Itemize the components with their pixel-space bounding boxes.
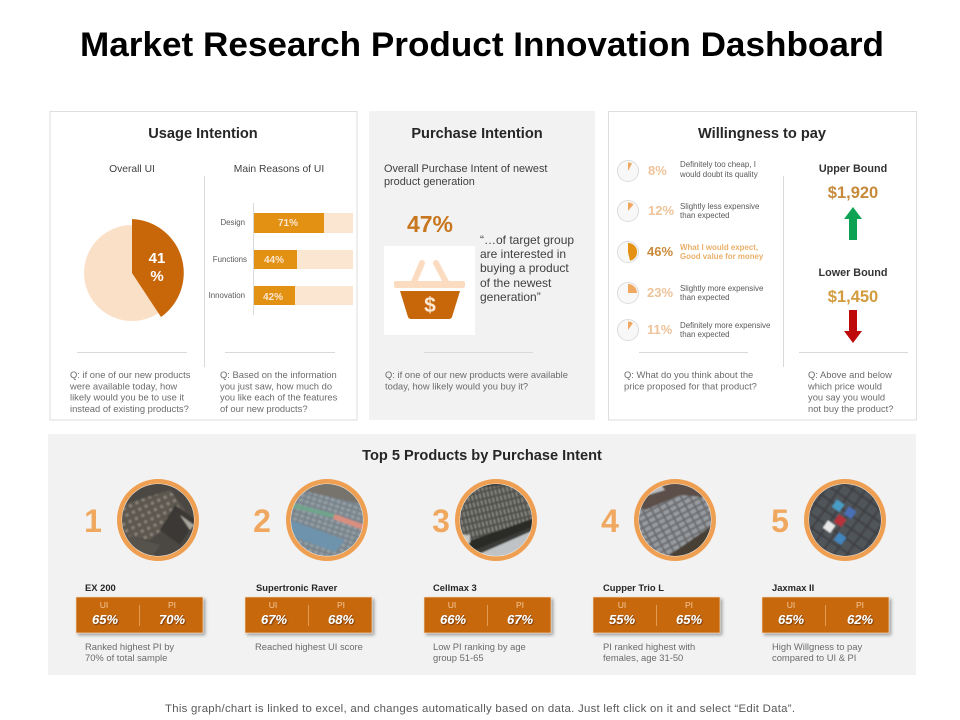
product 3: 3	[432, 503, 450, 539]
price row: 12%: than expected	[680, 211, 730, 220]
product 2: 67%	[261, 612, 287, 627]
product 1: 1	[84, 503, 102, 539]
icon: shopping basket	[384, 246, 475, 335]
price row: 11%: Definitely more expensive	[680, 321, 771, 330]
pie chart: overall UI 41%	[84, 219, 184, 321]
subheading: overall purchase intent: Overall Purchase Intent of newest	[384, 163, 547, 175]
heading: willingness to pay: Willingness to pay	[698, 126, 827, 142]
price row: 12%: 12%	[648, 203, 674, 218]
question: above and below: Q: Above and below	[808, 369, 892, 380]
product 3: UI	[448, 600, 456, 610]
panel: willingness to pay	[608, 112, 916, 420]
photo: product 5	[806, 481, 884, 559]
price row: 23%	[618, 282, 764, 304]
product 2: Reached highest UI score	[255, 641, 363, 652]
upper bound: Upper Bound	[819, 163, 887, 175]
title: Market Research Product Innovation Dashboard	[80, 26, 884, 64]
lower bound: $1,450	[828, 288, 878, 306]
upper bound	[819, 163, 887, 240]
question: overall UI: Q: if one of our new products	[70, 369, 191, 380]
question: above and below: not buy the product?	[808, 403, 893, 414]
bar chart: main reasons: Innovation	[209, 291, 245, 300]
price row: 46% highlighted: Good value for money	[680, 252, 764, 261]
lower bound	[819, 267, 887, 343]
icon: shopping basket: $	[424, 294, 436, 317]
price row: 8%: would doubt its quality	[679, 170, 758, 179]
question: price proposed: Q: What do you think about the	[624, 369, 753, 380]
product 5: Jaxmax II	[772, 582, 814, 593]
bar chart: main reasons: 42%	[263, 292, 283, 303]
question: main reasons: of our new products?	[220, 403, 308, 414]
bar chart: main reasons	[209, 203, 353, 315]
price row: 46% highlighted	[618, 242, 764, 262]
price row: 23%: 23%	[647, 285, 673, 300]
price row: 12%	[618, 200, 760, 222]
product 1: 70%	[159, 612, 185, 627]
product 2: 2	[253, 503, 271, 539]
panel: usage intention	[50, 112, 357, 420]
lower bound: Lower Bound	[819, 267, 887, 279]
heading: purchase intention: Purchase Intention	[411, 126, 543, 142]
product 2: PI	[337, 600, 345, 610]
price row: 23%: than expected	[680, 293, 730, 302]
product 2: UI	[269, 600, 277, 610]
quote: of the newest	[480, 276, 552, 290]
question: overall UI: likely would you be to use it	[70, 392, 185, 402]
product 5: 62%	[847, 612, 873, 627]
product 1: PI	[168, 600, 176, 610]
product 2	[245, 481, 372, 652]
price row: 23%: Slightly more expensive	[680, 284, 764, 293]
price row: 8%: 8%	[648, 163, 667, 178]
quote: buying a product	[480, 261, 569, 275]
product 3: 67%	[507, 612, 533, 627]
product 4: PI	[685, 600, 693, 610]
subheading: overall purchase intent: product generation	[384, 176, 475, 188]
question: main reasons: you like each of the features	[220, 392, 338, 402]
price row: 8%	[618, 160, 758, 182]
price row: 11%: 11%	[647, 322, 673, 337]
photo: product 1	[119, 481, 197, 560]
product 5: 65%	[778, 612, 804, 627]
quote: generation”	[480, 290, 541, 304]
product 3: group 51-65	[433, 652, 484, 663]
product 1: 65%	[92, 612, 118, 627]
stat: 47%: 47%	[407, 211, 453, 237]
product 5	[762, 481, 889, 663]
question: main reasons: you just saw, how much do	[220, 380, 332, 392]
price row: 46% highlighted: What I would expect,	[680, 243, 758, 252]
product 4: 55%	[609, 612, 635, 627]
question: above and below: which price would	[807, 380, 882, 392]
question: main reasons: Q: Based on the information	[220, 369, 337, 380]
bar chart: main reasons: Design	[220, 218, 245, 227]
footer note: This graph/chart is linked to excel, and changes automatically based on data. Just left click on it and select “Edit Data”.	[165, 703, 795, 715]
product 4: Cupper Trio L	[603, 582, 664, 593]
pie chart: overall UI 41%: 41	[149, 250, 165, 267]
product 3: Low PI ranking by age	[433, 641, 526, 652]
product 4: UI	[618, 600, 626, 610]
product 2: 68%	[328, 612, 354, 627]
product 3: Cellmax 3	[433, 582, 477, 593]
question: purchase: today, how likely would you buy it?	[385, 380, 528, 392]
price row: 8%: Definitely too cheap, I	[680, 160, 756, 169]
product 3	[424, 481, 551, 663]
heading: usage intention: Usage Intention	[148, 126, 258, 142]
price row: 12%: Slightly less expensive	[680, 202, 760, 211]
question: price proposed: price proposed for that product?	[624, 380, 757, 392]
bar chart: main reasons: Functions	[213, 255, 247, 264]
price row: 46% highlighted: 46%	[647, 244, 673, 259]
quote: “…of target group	[480, 233, 574, 247]
bar chart: main reasons: 44%	[264, 255, 284, 266]
product 5: UI	[787, 600, 795, 610]
panel: purchase intention	[369, 111, 595, 420]
question: overall UI: instead of existing products?	[70, 403, 189, 414]
product 1: Ranked highest PI by	[85, 641, 174, 652]
product 5: 5	[771, 503, 789, 539]
product 4: females, age 31-50	[603, 652, 683, 663]
product 5: High Willgness to pay	[772, 641, 862, 652]
product 2: Supertronic Raver	[256, 582, 338, 593]
price row: 11%: than expected	[680, 330, 730, 339]
arrow: up	[844, 207, 862, 240]
product 4	[593, 481, 720, 663]
heading: top 5 products: Top 5 Products by Purchase Intent	[362, 448, 602, 464]
product 3: 66%	[440, 612, 466, 627]
arrow: down	[844, 310, 862, 343]
bar chart: main reasons: 71%	[278, 218, 298, 229]
photo: product 2	[288, 481, 366, 559]
subheading: overall UI: Overall UI	[109, 164, 155, 175]
subheading: main reasons: Main Reasons of UI	[234, 164, 324, 175]
photo: product 3	[457, 481, 535, 559]
panel: top 5 products	[48, 434, 916, 675]
product 1	[76, 481, 203, 663]
question: overall UI: were available today, how	[69, 380, 177, 392]
question: purchase: Q: if one of our new products were available	[385, 369, 568, 380]
product 5: PI	[856, 600, 864, 610]
product 3: PI	[516, 600, 524, 610]
question: above and below: you say you would	[808, 392, 885, 402]
quote: are interested in	[480, 247, 566, 261]
price row: 11%	[618, 320, 771, 340]
product 1: EX 200	[85, 582, 116, 593]
pie chart: overall UI 41%: %	[150, 268, 164, 285]
upper bound: $1,920	[828, 184, 878, 202]
product 4: PI ranked highest with	[603, 641, 695, 652]
product 1: UI	[100, 600, 108, 610]
product 4: 4	[601, 503, 619, 539]
photo: product 4	[636, 481, 714, 559]
product 5: compared to UI & PI	[772, 652, 856, 663]
product 4: 65%	[676, 612, 702, 627]
product 1: 70% of total sample	[85, 652, 167, 663]
